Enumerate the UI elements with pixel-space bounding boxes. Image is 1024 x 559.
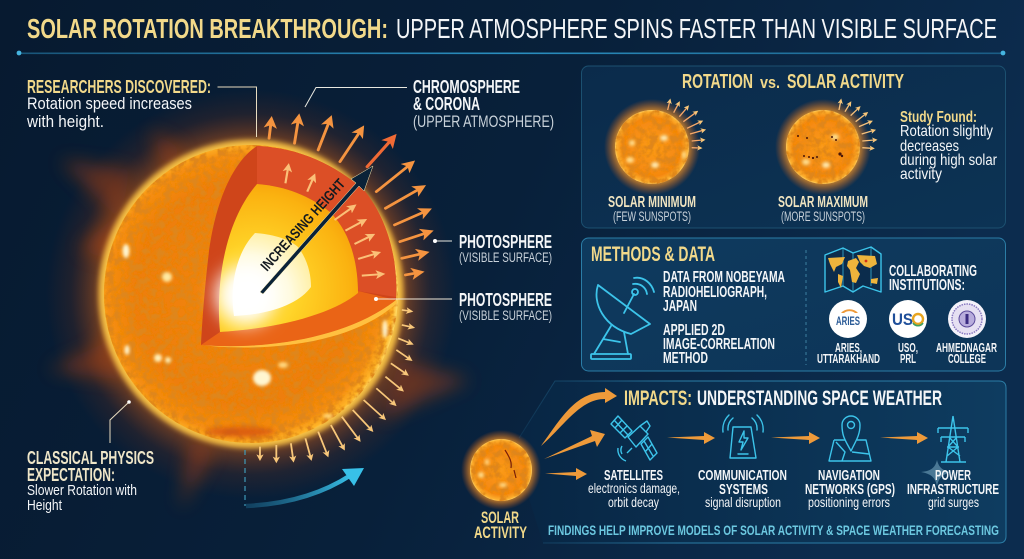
callout: classical physics expectation: [27, 400, 154, 514]
callout: chromosphere and corona: CHROMOSPHERE: [413, 77, 520, 97]
panel heading: IMPACTS:: [624, 387, 692, 410]
title rule: [17, 51, 1005, 55]
logo: USO: [889, 300, 927, 338]
solar activity sun: [461, 430, 541, 510]
solar maximum label: [778, 194, 868, 224]
communication text: [698, 468, 787, 510]
callout: classical physics expectation: EXPECTATION:: [27, 465, 115, 485]
navigation text: NAVIGATION: [818, 468, 880, 484]
icon: world map: [825, 247, 881, 292]
methods text: IMAGE-CORRELATION: [663, 336, 775, 353]
institution labels: USO,: [898, 340, 918, 355]
solar minimum label: [608, 194, 696, 224]
solar maximum sun: [775, 99, 874, 195]
satellites text: [588, 468, 680, 510]
institution labels: [817, 340, 997, 366]
callout: photosphere lower: [374, 290, 552, 323]
panel heading: SOLAR ACTIVITY: [787, 71, 904, 93]
study found text: during high solar: [900, 152, 998, 169]
solar maximum label: SOLAR MAXIMUM: [778, 194, 868, 211]
flares and glow behind sun: [46, 89, 470, 510]
methods text: METHOD: [663, 350, 708, 367]
study found text: decreases: [900, 138, 959, 155]
methods text: JAPAN: [663, 298, 697, 315]
study found text: Rotation slightly: [900, 123, 993, 140]
satellites text: SATELLITES: [604, 468, 663, 484]
navigation text: [805, 468, 895, 510]
communication text: signal disruption: [705, 494, 781, 510]
methods text: DATA FROM NOBEYAMA: [663, 269, 785, 286]
satellites text: orbit decay: [608, 494, 659, 510]
solar activity label: SOLAR: [481, 509, 519, 527]
institution labels: PRL: [900, 351, 916, 366]
panel: methods and data: [582, 238, 1006, 371]
panel heading: [682, 71, 904, 93]
callout: researchers discovered: RESEARCHERS DISCOVERED:: [27, 77, 211, 97]
methods text: RADIOHELIOGRAPH,: [663, 284, 767, 301]
logo: USO: US: [892, 310, 913, 329]
callout: chromosphere and corona: (UPPER ATMOSPHERE): [413, 112, 554, 131]
increasing height arrow: INCREASING HEIGHT: [258, 176, 349, 275]
logo: Ahmednagar College: [948, 300, 986, 338]
icon: satellite: [611, 416, 657, 461]
communication text: SYSTEMS: [719, 482, 768, 498]
title: SOLAR ROTATION BREAKTHROUGH:: [27, 13, 388, 44]
power text: grid surges: [928, 494, 979, 510]
inner arrows: [285, 168, 380, 276]
institution labels: ARIES,: [835, 340, 862, 355]
icon: satellite dish: [591, 278, 654, 359]
communication text: COMMUNICATION: [698, 468, 787, 484]
power text: [907, 468, 999, 510]
panel heading: vs.: [760, 73, 780, 92]
sun sphere: [99, 140, 403, 448]
callout: researchers discovered: with height.: [26, 112, 104, 131]
callout: researchers discovered: [26, 77, 257, 137]
collaborating institutions heading: [889, 263, 977, 294]
rotation direction arrow: [245, 450, 364, 506]
callout: chromosphere and corona: [305, 77, 554, 131]
callout: photosphere lower: PHOTOSPHERE: [459, 290, 552, 310]
study found text: activity: [900, 166, 942, 183]
solar minimum sun: [604, 99, 703, 195]
sun cutaway illustration: [46, 89, 470, 510]
panel: impacts: [519, 381, 1006, 543]
callout: photosphere upper: [433, 232, 552, 265]
logo: ARIES: [829, 300, 867, 338]
icon: power tower: [938, 416, 968, 462]
institution labels: COLLEGE: [948, 351, 986, 366]
icon: phone signal: [723, 415, 763, 458]
navigation text: NETWORKS (GPS): [805, 482, 895, 498]
callout: classical physics expectation: Slower Rotation with: [27, 482, 137, 499]
cutaway wedge layers: [201, 146, 397, 347]
navigation text: positioning errors: [808, 494, 890, 510]
outward arrows lower: [260, 310, 411, 459]
callout: photosphere upper: PHOTOSPHERE: [459, 232, 552, 252]
power star mark: [921, 460, 952, 486]
solar maximum label: (MORE SUNSPOTS): [781, 209, 865, 224]
logo: ARIES: ARIES: [836, 314, 860, 328]
solar activity label: ACTIVITY: [474, 524, 527, 542]
solar minimum label: SOLAR MINIMUM: [608, 194, 696, 211]
institution labels: UTTARAKHAND: [817, 351, 880, 366]
solar minimum label: (FEW SUNSPOTS): [613, 209, 691, 224]
panel heading: ROTATION: [682, 71, 753, 93]
outward arrows upper: [269, 121, 426, 275]
panel heading: METHODS & DATA: [591, 243, 715, 266]
callout: researchers discovered: Rotation speed increases: [27, 94, 192, 113]
callout: chromosphere and corona: & CORONA: [413, 94, 480, 114]
study found text: [900, 109, 998, 183]
callout: classical physics expectation: Height: [27, 497, 63, 514]
power text: POWER: [935, 468, 971, 484]
panel heading: [624, 387, 942, 410]
title: [27, 13, 997, 44]
solar activity label: [474, 509, 527, 542]
callout: photosphere lower: (VISIBLE SURFACE): [459, 308, 552, 323]
methods text: [663, 269, 785, 367]
satellites text: electronics damage,: [588, 480, 680, 496]
panel: rotation vs solar activity: [582, 66, 1006, 228]
collaborating institutions heading: COLLABORATING: [889, 263, 977, 280]
impact arrows: [541, 388, 928, 480]
icon: map pin: [829, 416, 871, 461]
callout: photosphere upper: (VISIBLE SURFACE): [459, 250, 552, 265]
callout: classical physics expectation: CLASSICAL PHYSICS: [27, 448, 154, 468]
collaborating institutions heading: INSTITUTIONS:: [889, 277, 965, 294]
study found text: Study Found:: [900, 109, 977, 126]
methods text: APPLIED 2D: [663, 322, 725, 339]
